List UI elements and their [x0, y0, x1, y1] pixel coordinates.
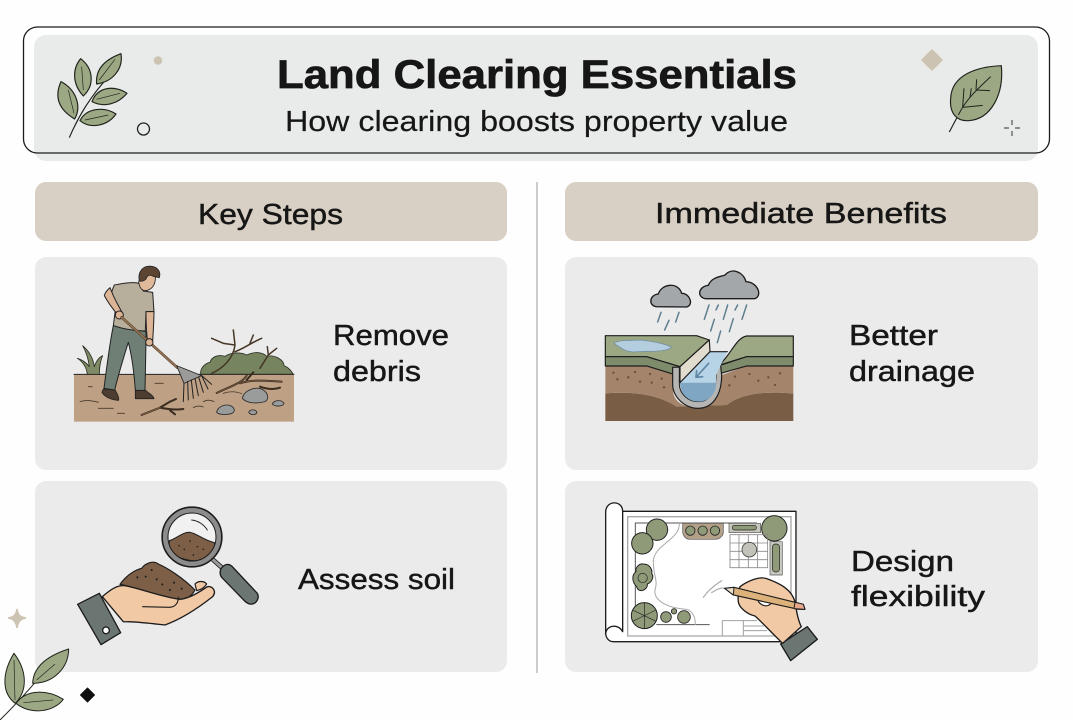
pencil sketch lines [703, 581, 725, 597]
upper soil [605, 366, 793, 408]
planting bed [683, 523, 723, 539]
illustration: man raking debris [74, 266, 294, 422]
sparkle tan [922, 50, 942, 70]
cuff [78, 593, 121, 645]
panel: immediate benefits heading [565, 182, 1038, 241]
trees [646, 519, 668, 540]
illustration: landscape plan with drawing hand [606, 503, 817, 661]
soil specks [613, 372, 780, 387]
decoration: leaf sprig bottom left [0, 649, 69, 720]
shirt [112, 283, 154, 331]
rake [122, 317, 177, 368]
panel: better drainage [565, 257, 1038, 470]
text: better drainage: drainage [849, 356, 975, 388]
hedge beds [729, 523, 761, 533]
hand [195, 581, 207, 591]
icon: leaf top right [949, 66, 1002, 132]
decoration: tan sparkle [8, 609, 26, 628]
panel: assess soil [35, 481, 507, 672]
title: Land Clearing Essentials [277, 53, 797, 97]
text: remove debris: Remove [333, 320, 449, 352]
text: design flexibility: flexibility [851, 581, 986, 613]
panel: design flexibility [565, 481, 1038, 672]
panel: remove debris [35, 257, 507, 470]
icon: leaf sprig top left [58, 54, 127, 138]
illustration: drainage channel under rain [605, 271, 793, 421]
decoration: black diamond [80, 688, 94, 702]
text: remove debris: debris [333, 356, 421, 388]
magnifier handle [213, 560, 222, 567]
boots [102, 389, 154, 400]
sparkle thin [1004, 120, 1020, 136]
cuff [781, 627, 817, 661]
panel: immediate benefits heading: Immediate Benefits [655, 198, 947, 230]
subtitle: How clearing boosts property value [285, 106, 788, 138]
text: design flexibility: Design [851, 546, 954, 578]
panel: key steps heading [35, 182, 507, 241]
steps [722, 621, 767, 635]
hand [738, 578, 801, 643]
text: assess soil: Assess soil [298, 564, 455, 596]
grass layers [605, 336, 709, 367]
channel [673, 366, 722, 408]
deep soil [605, 393, 793, 421]
soil pile [120, 562, 195, 600]
trousers [104, 326, 146, 390]
head [139, 272, 155, 291]
arms [104, 288, 123, 317]
rocks [217, 388, 284, 415]
sheet [606, 503, 796, 642]
dot tan [154, 56, 162, 65]
ring dot [138, 123, 150, 135]
column divider [536, 182, 538, 673]
puddle [614, 340, 672, 352]
rain [658, 305, 747, 343]
clouds [651, 285, 690, 307]
panel: key steps heading: Key Steps [198, 199, 343, 231]
patio grid [730, 535, 768, 568]
text: better drainage: Better [849, 320, 938, 352]
illustration: hand holding soil with magnifier [78, 507, 258, 645]
sticks [142, 399, 183, 415]
header banner [24, 27, 1050, 161]
pencil [725, 587, 805, 609]
